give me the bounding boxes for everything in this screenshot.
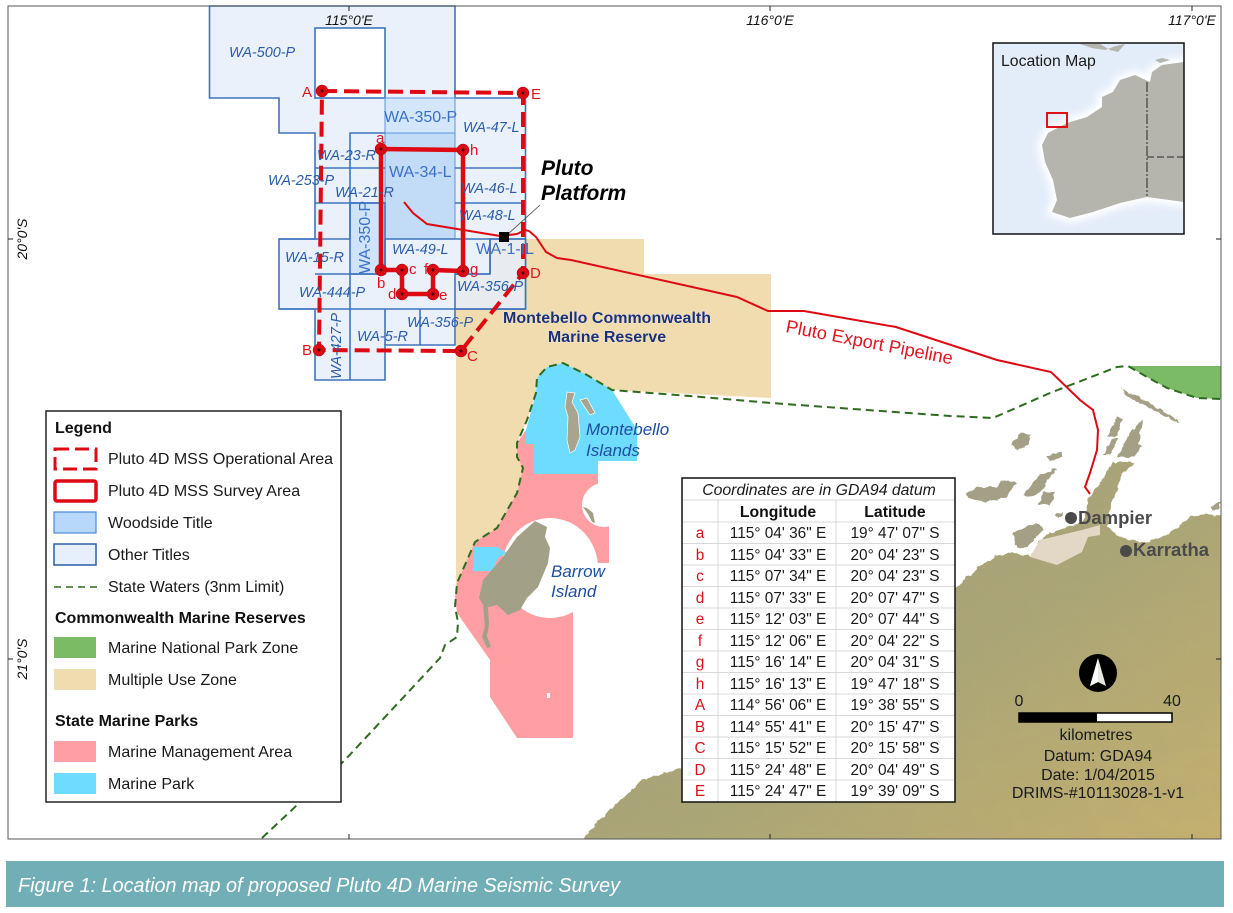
legend: marine park: Marine Park	[108, 776, 195, 793]
boundary point labels: D	[530, 265, 541, 282]
legend: management area	[54, 741, 292, 762]
graticule labels: 116°0'E	[746, 12, 795, 28]
legend: multiple use zone: Multiple Use Zone	[108, 672, 237, 689]
boundary point labels: f	[424, 261, 429, 278]
land: mainland with terrain	[578, 460, 1226, 843]
Barrow Island label	[551, 562, 607, 601]
scale bar	[1015, 693, 1181, 744]
table rows: 115° 04' 36" E	[730, 525, 826, 542]
table rows: 115° 24' 48" E	[730, 762, 826, 779]
map credits: Datum: GDA94	[1044, 748, 1152, 765]
title labels: WA-350-P	[357, 201, 374, 274]
table rows: 20° 07' 47" S	[850, 590, 940, 607]
table rows: B	[695, 719, 705, 736]
table rows: 19° 47' 07" S	[850, 525, 940, 542]
table rows: 20° 04' 31" S	[850, 654, 940, 671]
title labels: WA-500-P	[229, 45, 296, 61]
graticule labels: 20°0'S	[14, 218, 30, 260]
table rows: 114° 55' 41" E	[730, 719, 826, 736]
operational area dashed boundary	[319, 91, 523, 351]
table rows: 115° 15' 52" E	[730, 740, 826, 757]
table rows: 115° 12' 03" E	[730, 611, 826, 628]
title labels: WA-15-R	[285, 250, 344, 266]
legend: operational area: Pluto 4D MSS Operational Area	[108, 451, 333, 468]
woodside title WA-350-P	[385, 98, 455, 133]
salt ponds near Dampier	[1030, 525, 1100, 565]
table rows: A	[695, 697, 706, 714]
table rows: 115° 07' 33" E	[730, 590, 826, 607]
legend: multiple use zone	[54, 669, 237, 690]
title labels: WA-253-P	[268, 173, 335, 189]
legend: woodside title: Woodside Title	[108, 515, 213, 532]
table rows	[694, 525, 940, 800]
title labels: WA-5-R	[357, 329, 408, 345]
boundary point labels	[302, 84, 541, 365]
legend: national park zone	[54, 637, 298, 658]
table rows: 20° 15' 47" S	[850, 719, 940, 736]
marine park: Barrow	[473, 547, 507, 571]
inset: location map: Location Map	[1001, 53, 1096, 70]
scale bar: 40	[1163, 693, 1181, 710]
boundary point labels: A	[302, 84, 312, 101]
title labels: WA-356-P	[407, 315, 474, 331]
table rows: 115° 04' 33" E	[730, 547, 826, 564]
Pluto platform marker	[499, 232, 509, 242]
table rows: 20° 04' 23" S	[850, 547, 940, 564]
title labels: WA-350-P	[384, 109, 457, 126]
Barrow Island	[479, 507, 595, 648]
table header: Longitude	[740, 504, 816, 521]
figure caption: Figure 1: Location map of proposed Pluto 4D Marine Seismic Survey	[18, 874, 622, 897]
title labels: WA-34-L	[389, 164, 452, 181]
graticule labels	[14, 12, 1217, 680]
Dampier label: Dampier	[1078, 507, 1152, 528]
Montebello Islands label	[586, 420, 669, 460]
boundary point labels: g	[470, 261, 478, 278]
legend heading: state parks: State Marine Parks	[55, 713, 198, 730]
legend heading: Legend	[55, 420, 112, 437]
title labels: WA-21-R	[335, 185, 394, 201]
icon: north arrow	[1079, 654, 1117, 692]
graticule labels: 117°0'E	[1168, 12, 1217, 28]
table rows: 115° 16' 14" E	[730, 654, 826, 671]
Pluto Platform label	[541, 157, 626, 205]
land: coastal islands near Dampier	[967, 388, 1220, 548]
scale bar: 0	[1015, 693, 1024, 710]
title labels: WA-48-L	[459, 208, 516, 224]
table rows: 20° 04' 49" S	[850, 762, 940, 779]
title labels: WA-1-IL	[476, 241, 534, 258]
Montebello Commonwealth Marine Reserve label	[503, 310, 711, 346]
title labels: WA-356-P	[457, 279, 524, 295]
boundary point labels: b	[377, 275, 385, 292]
graticule labels: 115°0'E	[325, 12, 374, 28]
table rows: 115° 12' 06" E	[730, 633, 826, 650]
survey area boundary	[381, 149, 463, 294]
table rows: 19° 47' 18" S	[850, 676, 940, 693]
legend: management area: Marine Management Area	[108, 744, 292, 761]
table rows: 115° 16' 13" E	[730, 676, 826, 693]
boundary point labels: d	[388, 286, 396, 303]
table header: Latitude	[864, 504, 926, 521]
other titles block	[210, 6, 526, 380]
boundary point labels: e	[439, 287, 447, 304]
Montebello Islands land	[565, 392, 595, 453]
table rows: E	[695, 783, 705, 800]
title labels: WA-49-L	[392, 242, 449, 258]
legend: marine park	[54, 773, 195, 794]
legend: national park zone: Marine National Park Zone	[108, 640, 298, 657]
boundary point labels: C	[467, 348, 478, 365]
table rows: C	[694, 740, 706, 757]
table rows: 20° 07' 44" S	[850, 611, 940, 628]
table rows: D	[694, 762, 706, 779]
legend: woodside title	[54, 512, 213, 533]
map credits: DRIMS-#10113028-1-v1	[1012, 785, 1184, 802]
legend: other titles	[54, 544, 190, 565]
marine management area	[455, 430, 626, 738]
boundary point labels: c	[409, 261, 417, 278]
legend: state waters: State Waters (3nm Limit)	[108, 579, 284, 596]
table rows: g	[696, 654, 704, 671]
title labels: WA-427-P	[329, 312, 345, 379]
boundary point labels: B	[302, 342, 312, 359]
boundary point labels: E	[531, 86, 541, 103]
open area inside titles	[315, 28, 385, 98]
table rows: b	[696, 547, 704, 564]
table rows: 19° 39' 09" S	[850, 783, 940, 800]
legend: survey area	[55, 481, 300, 501]
table rows: 115° 24' 47" E	[730, 783, 826, 800]
boundary point labels: h	[470, 142, 478, 159]
table rows: 19° 38' 55" S	[850, 697, 940, 714]
table rows: 20° 04' 22" S	[850, 633, 940, 650]
legend	[46, 411, 341, 802]
title labels: WA-46-L	[461, 181, 518, 197]
grey title	[455, 239, 526, 309]
Montebello Commonwealth Marine Reserve label: Montebello Commonwealth	[503, 310, 711, 327]
map credits	[1012, 748, 1184, 802]
multiple use zone	[456, 239, 771, 600]
table rows: e	[696, 611, 704, 628]
state waters limit dashed line	[262, 363, 1221, 838]
table rows: 115° 07' 34" E	[730, 568, 826, 585]
marine park: Montebello	[526, 363, 637, 474]
table rows: h	[696, 676, 704, 693]
map credits: Date: 1/04/2015	[1041, 767, 1155, 784]
woodside title WA-34-L	[385, 133, 455, 239]
Pluto export pipeline	[404, 202, 1098, 494]
scale bar: kilometres	[1060, 727, 1132, 744]
title labels: WA-47-L	[463, 120, 520, 136]
title labels: WA-23-R	[317, 148, 376, 164]
table rows: c	[696, 568, 704, 585]
leader line to platform	[507, 205, 540, 235]
Pluto Platform label: Platform	[541, 182, 626, 205]
coordinates table	[682, 478, 955, 802]
table rows: d	[696, 590, 704, 607]
legend: operational area	[55, 449, 333, 469]
table rows: 20° 15' 58" S	[850, 740, 940, 757]
Pluto Platform label: Pluto	[541, 157, 594, 180]
table header	[740, 504, 926, 521]
boundary point labels: a	[376, 130, 385, 147]
table title: Coordinates are in GDA94 datum	[702, 482, 936, 499]
Pluto Export Pipeline label: Pluto Export Pipeline	[784, 315, 955, 368]
table rows: 20° 04' 23" S	[850, 568, 940, 585]
Barrow Island label: Island	[551, 582, 597, 601]
title labels: WA-444-P	[299, 285, 366, 301]
inset: location map	[993, 43, 1184, 234]
Montebello Commonwealth Marine Reserve label: Marine Reserve	[548, 329, 666, 346]
petroleum titles	[210, 6, 526, 380]
graticule labels: 21°0'S	[14, 638, 30, 680]
Barrow Island label: Barrow	[551, 562, 607, 581]
legend heading: commonwealth: Commonwealth Marine Reserves	[55, 610, 306, 627]
strip WA-350-P	[350, 203, 385, 274]
Karratha label: Karratha	[1133, 539, 1210, 560]
title labels	[229, 45, 534, 379]
table rows: f	[698, 633, 703, 650]
legend: other titles: Other Titles	[108, 547, 190, 564]
table rows: a	[696, 525, 705, 542]
table rows: 114° 56' 06" E	[730, 697, 826, 714]
boundary point markers	[313, 85, 529, 357]
figure caption	[6, 861, 1224, 907]
legend: survey area: Pluto 4D MSS Survey Area	[108, 483, 300, 500]
Montebello Islands label: Islands	[586, 441, 640, 460]
marine national park zone	[1128, 366, 1221, 399]
Montebello Islands label: Montebello	[586, 420, 669, 439]
